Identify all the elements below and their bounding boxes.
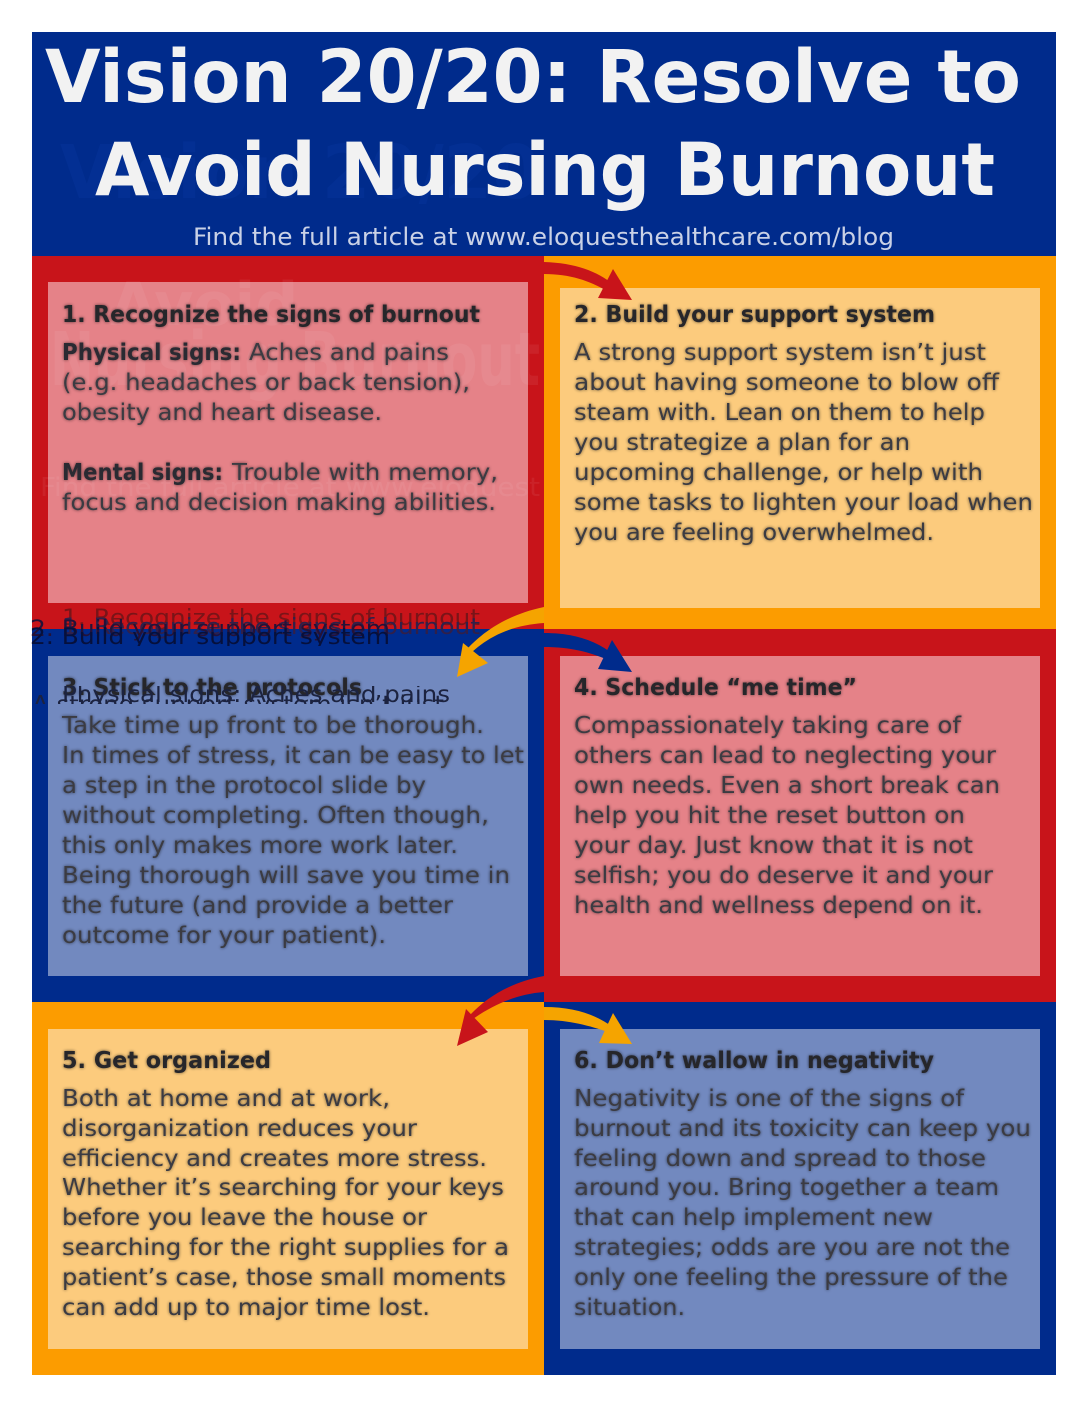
panel 6 text: Negativity is one of the signs of [574,1086,965,1112]
panel 6 text [574,1048,1031,1321]
panel 3 text: 3. Stick to the protocols [62,675,362,701]
overlapping ghost body text [36,686,449,704]
panel 5 text: before you leave the house or [62,1205,428,1231]
panel 1 text: Trouble with memory, [231,460,498,486]
panel 5 text: Both at home and at work, [62,1086,390,1112]
panel 3 text: Being thorough will save you time in [62,863,510,889]
panel 6 text: around you. Bring together a team [574,1175,999,1201]
panel 1 text: Physical signs: [62,340,241,366]
panel 1: recognize the signs [40,270,540,603]
panel 4 text: health and wellness depend on it. [574,893,983,919]
panel 5: get organized [48,1029,528,1349]
subtitle: Find the full article at www.eloquesthealthcare.com/blog [193,223,894,251]
arrow: panel 1 to panel 2 [544,262,632,300]
panel 5 text: can add up to major time lost. [62,1295,430,1321]
panel 5 text: efficiency and creates more stress. [62,1146,487,1172]
panel 5 text: disorganization reduces your [62,1116,418,1142]
panel 2: support system [560,288,1040,608]
panel 1 text: Mental signs: [62,460,223,486]
panel 1 text: 1. Recognize the signs of burnout [62,302,480,328]
panel 3 text: outcome for your patient). [62,923,386,949]
panel 6 text: strategies; odds are you are not the [574,1235,1010,1261]
panel 6: negativity [560,1029,1040,1349]
panel 2 text: steam with. Lean on them to help [574,400,985,426]
panel 3 text: Take time up front to be thorough. [61,713,484,739]
panel 1 text: focus and decision making abilities. [62,490,496,516]
panel 3 text: this only makes more work later. [62,833,458,859]
arrow: panel 4 to panel 5 [457,976,544,1046]
panel 4 text: your day. Just know that it is not [574,833,973,859]
header banner [32,32,1056,256]
panel 1 text: (e.g. headaches or back tension), [62,370,470,396]
ghost artefact text: Avoid [110,270,298,340]
panel 4 text: selfish; you do deserve it and your [574,863,994,889]
panel 2 text: you strategize a plan for an [574,430,910,456]
overlapping ghost body text: Physical signs: Aches and pains [62,682,450,708]
panel 1 text: Aches and pains [249,340,449,366]
section backgrounds [32,256,1056,1375]
panel 4 text: help you hit the reset button on [574,803,965,829]
panel 1 text [62,302,498,516]
overlapping ghost headings: 2. Build your support system [30,617,390,642]
arrow: panel 5 to panel 6 [544,1007,632,1044]
panel 5 text: 5. Get organized [62,1048,271,1074]
panel 3 text: a step in the protocol slide by [62,773,426,799]
title [45,35,1021,213]
panel 5 text [62,1048,509,1321]
panel 6 text: situation. [574,1295,685,1321]
panel 6 text: burnout and its toxicity can keep you [574,1116,1031,1142]
ghost artefact text [40,270,540,503]
ghost artefact text: Nursing Burnout [50,317,540,403]
panel 2 text: A strong support system isn’t just [574,340,986,366]
panel 2 text: about having someone to blow off [574,370,1000,396]
panel 1 text: obesity and heart disease. [62,400,382,426]
overlapping ghost headings: 2. Build your support system [30,625,390,650]
arrow: panel 2 to panel 3 [457,607,544,677]
panel 4 text: Compassionately taking care of [574,713,962,739]
panel 4 text: 4. Schedule “me time” [574,675,857,701]
panel 5 text: Whether it’s searching for your keys [62,1175,504,1201]
panel 4 text [574,675,1000,919]
panel 5 text: searching for the right supplies for a [62,1235,509,1261]
panel 6 text: feeling down and spread to those [574,1146,986,1172]
panel 4: me time [560,656,1040,976]
panel 2 text: some tasks to lighten your load when [574,490,1033,516]
overlapping ghost headings [32,608,480,646]
panel 6 text: that can help implement new [574,1205,933,1231]
panel 2 text: you are feeling overwhelmed. [574,520,934,546]
panel 5 text: patient’s case, those small moments [62,1265,506,1291]
panel 4 text: others can lead to neglecting your [574,743,997,769]
panel 3: stick to the protocols [48,656,528,976]
panel 2 text: upcoming challenge, or help with [574,460,983,486]
panel 6 text: only one feeling the pressure of the [574,1265,1008,1291]
panel 3 text: without completing. Often though, [62,803,489,829]
arrow: panel 3 to panel 4 [544,633,632,672]
ghost artefact text: Find the full article at www.eloquest [40,473,540,503]
ghost title: Vision 20/20 [60,130,540,216]
overlapping ghost headings: 1. Recognize the signs of burnout [62,615,480,640]
panel 3 text [61,675,524,949]
panel 2 text [574,302,1033,546]
panel 3 text: the future (and provide a better [62,893,454,919]
overlapping ghost headings: 1. Recognize the signs of burnout [62,606,480,631]
panel 4 text: own needs. Even a short break can [574,773,1000,799]
title: Avoid Nursing Burnout [95,128,995,213]
panel 2 text: 2. Build your support system [574,302,935,328]
title: Vision 20/20: Resolve to [45,35,1021,120]
panel 3 text: In times of stress, it can be easy to let [62,743,524,769]
panel 6 text: 6. Don’t wallow in negativity [574,1048,934,1074]
overlapping ghost body text: A strong support system isn’t just [32,692,444,718]
